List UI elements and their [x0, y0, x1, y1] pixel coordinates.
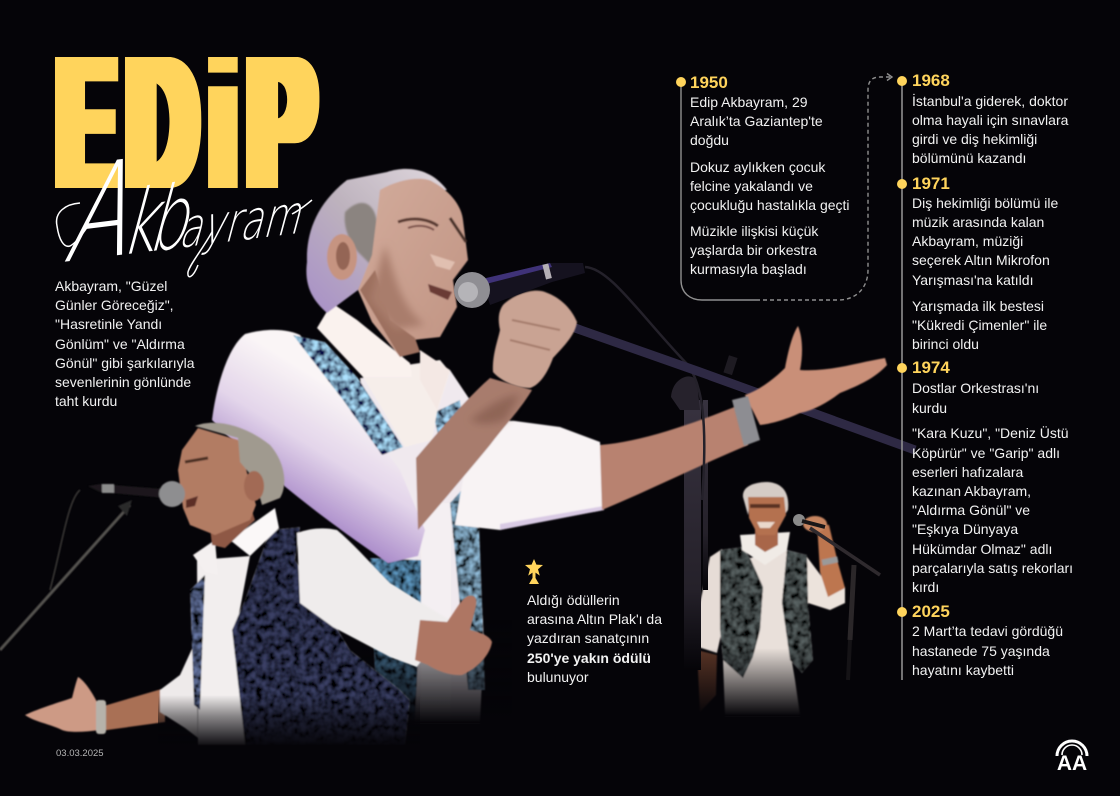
timeline entry: 1968: 1968	[912, 71, 950, 90]
main forearm raised	[416, 378, 532, 530]
title: EDiP: P	[248, 20, 314, 226]
intro text: Gönlüm" ve "Aldırma	[55, 336, 185, 352]
timeline entry: 1974: Köpürür" ve "Garip" adlı	[912, 445, 1060, 461]
main microphone	[454, 263, 585, 308]
small portrait left sleeve	[160, 640, 198, 738]
timeline entry: 2025	[897, 602, 1063, 678]
timeline entry: 1974: "Aldırma Gönül" ve	[912, 502, 1030, 518]
timeline entry: 1971: Diş hekimliği bölümü ile	[912, 195, 1058, 211]
small portrait vest	[232, 527, 410, 745]
photo collage: three portraits of the singer	[0, 57, 916, 744]
timeline entry: 1974: parçalarıyla satış rekorları	[912, 560, 1073, 576]
intro text: Günler Göreceğiz",	[55, 297, 174, 313]
timeline entry: 1950: felcine yakalandı ve	[690, 178, 813, 194]
timeline entry: 1974: kırdı	[912, 579, 939, 595]
main ear	[327, 234, 357, 280]
timeline entry: 1974: 1974	[912, 358, 950, 377]
fade: right portrait bottom	[680, 648, 830, 716]
photo: singer at right, small	[692, 482, 845, 715]
timeline entry: 1974: kazınan Akbayram,	[912, 483, 1031, 499]
main sleeve viewer left	[212, 330, 425, 563]
main forearm extended	[600, 404, 748, 510]
title: EDiP	[55, 57, 320, 188]
timeline entry: 1968: İstanbul'a giderek, doktor	[912, 93, 1068, 109]
title: EDiP: i	[211, 19, 235, 226]
timeline entry: 1971: seçerek Altın Mikrofon	[912, 252, 1050, 268]
intro text: Gönül" gibi şarkılarıyla	[55, 355, 195, 371]
logo: AA	[1056, 740, 1088, 775]
main shirt front and collar	[360, 360, 450, 447]
timeline entry: 1974: Hükümdar Olmaz" adlı	[912, 541, 1052, 557]
fade: bottom of the lower left portrait	[158, 695, 420, 748]
intro text: Akbayram, "Güzel	[55, 278, 167, 294]
small portrait microphone	[88, 484, 165, 498]
timeline entry: 1968: girdi ve diş hekimliği	[912, 131, 1037, 147]
timeline entry: 1971: Akbayram, müziği	[912, 233, 1023, 249]
small portrait mic stand	[0, 505, 130, 650]
small portrait arm left	[97, 688, 165, 731]
timeline entry: 1968: bölümünü kazandı	[912, 150, 1026, 166]
timeline entry: 1974: Dostlar Orkestrası'nı	[912, 380, 1039, 396]
timeline entry: 1974: "Eşkıya Dünyaya	[912, 521, 1018, 537]
timeline entry: 1974	[897, 358, 1073, 595]
cable of the main microphone	[585, 267, 704, 500]
title: EDiP: E	[58, 20, 114, 226]
timeline entry: 2025: hayatını kaybetti	[912, 662, 1014, 678]
intro text: "Hasretinle Yandı	[55, 316, 162, 332]
timeline entry: 1971: müzik arasında kalan	[912, 214, 1044, 230]
main hand holding microphone	[493, 291, 577, 388]
timeline entry: 1971	[897, 174, 1058, 352]
main microphone stand boom	[558, 322, 915, 450]
timeline entry: 1971: "Kükredi Çimenler" ile	[912, 317, 1047, 333]
award callout text: arasına Altın Plak'ı da	[527, 611, 662, 627]
small portrait shirt front	[197, 556, 250, 745]
timeline entry: 1971: Yarışması'na katıldı	[912, 272, 1033, 288]
intro text	[55, 278, 195, 409]
timeline entry: 2025: 2025	[912, 602, 950, 621]
timeline entry: 2025: hastanede 75 yaşında	[912, 643, 1050, 659]
title: EDiP: D	[128, 20, 196, 226]
main vest left strip	[293, 335, 403, 455]
timeline entry: 1968: olma hayali için sınavlara	[912, 112, 1068, 128]
timeline entry: 1974: eserleri hafızalara	[912, 464, 1023, 480]
timeline entry: 1950: doğdu	[690, 132, 729, 148]
main vest right strip	[450, 473, 485, 690]
award callout text	[527, 592, 662, 685]
intro text: taht kurdu	[55, 393, 117, 409]
award callout text: bulunuyor	[527, 669, 588, 685]
small portrait sleeve	[297, 528, 450, 667]
logo: AA: AA	[1057, 752, 1087, 775]
main vest lower	[370, 558, 421, 722]
timeline entry: 2025: 2 Mart’ta tedavi gördüğü	[912, 623, 1063, 639]
main microphone stand pole	[671, 355, 738, 670]
timeline entry: 1950	[676, 73, 850, 277]
fade: bottom of the main portrait	[362, 620, 512, 723]
photo: main singer	[212, 169, 748, 722]
intro text: sevenlerinin gönlünde	[55, 374, 191, 390]
award callout text: Aldığı ödüllerin	[527, 592, 620, 608]
subtitle: Akbayram: Akbayram	[53, 108, 332, 295]
main hand open, with watch	[732, 326, 887, 446]
small portrait collar	[230, 508, 279, 556]
timeline entry: 1950: yaşlarda bir orkestra	[690, 242, 817, 258]
small portrait neck and face	[210, 505, 255, 548]
timeline entry: 1950: Dokuz aylıkken çocuk	[690, 158, 825, 174]
small portrait hand	[415, 596, 492, 675]
timeline entry: 1974: "Kara Kuzu", "Deniz Üstü	[912, 425, 1069, 441]
timeline entry: 1971: 1971	[912, 174, 950, 193]
main sleeve viewer right	[455, 421, 604, 530]
photo: singer at lower left	[0, 423, 492, 745]
timeline entry: 1974: kurdu	[912, 400, 947, 416]
timeline entry: 1950: Müzikle ilişkisi küçük	[690, 222, 818, 238]
small portrait ear	[244, 471, 264, 501]
timeline entry: 1950: 1950	[690, 73, 728, 92]
main hair	[306, 169, 447, 313]
award callout text: 250'ye yakın ödülü	[527, 650, 651, 666]
icon: star trophy	[525, 559, 543, 584]
timeline entry: 1971: Yarışmada ilk bestesi	[912, 298, 1044, 314]
date: 03.03.2025	[56, 748, 104, 759]
timeline entry: 1971: birinci oldu	[912, 336, 979, 352]
main torso and shirt	[360, 370, 484, 722]
timeline entry: 1950: Aralık’ta Gaziantep'te	[690, 113, 823, 129]
timeline entry: 1950: kurmasıyla başladı	[690, 261, 807, 277]
mic stand: right portrait	[793, 514, 880, 680]
timeline entry: 1950: Edip Akbayram, 29	[690, 94, 808, 110]
timeline entry: 1950: çocukluğu hastalıkla geçti	[690, 197, 850, 213]
main face and neck	[358, 179, 468, 357]
timeline entry: 1968	[897, 71, 1068, 166]
award callout text: yazdıran sanatçının	[527, 630, 649, 646]
small portrait hair	[195, 423, 284, 505]
